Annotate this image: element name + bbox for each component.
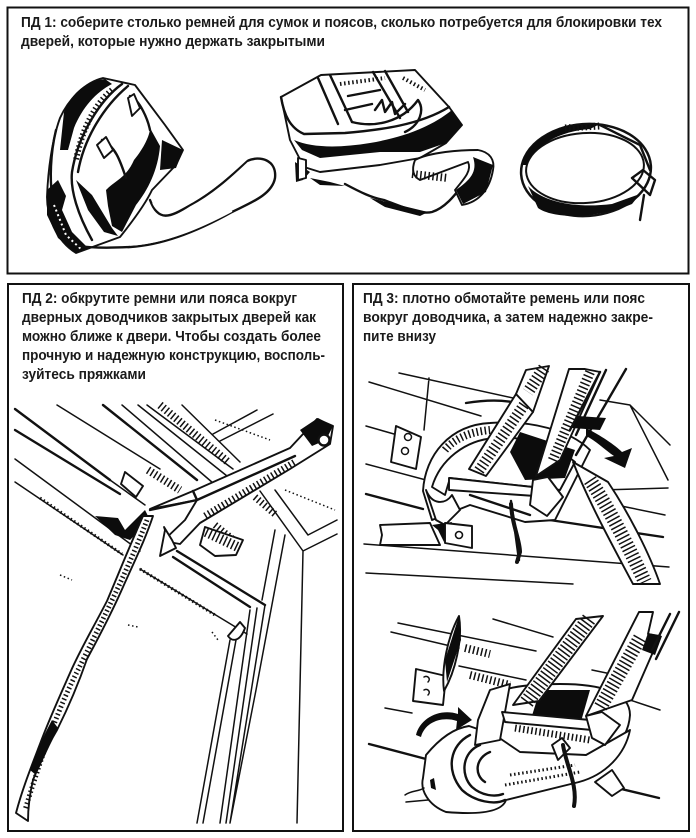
panel: step 2 — [8, 284, 343, 831]
heading: step 2 text — [22, 290, 325, 383]
illustration: belt wrapped around closer, top — [364, 366, 670, 584]
upper arm — [469, 394, 533, 476]
icon: shoulder bag — [281, 70, 493, 216]
front band — [422, 726, 630, 813]
illustration: door closer with strap — [15, 405, 337, 823]
heading: step 2 text: ПД 2: обкрутите ремни или пояса вокруг — [22, 290, 297, 307]
specks — [60, 420, 335, 640]
belt loop — [423, 422, 590, 522]
door closer arm — [95, 418, 333, 556]
heading: step 2 text: можно ближе к двери. Чтобы создать более — [22, 328, 321, 345]
clamp under band — [405, 788, 428, 802]
illustration: belt wrapped around closer, bottom — [369, 612, 679, 813]
strap — [16, 516, 153, 821]
heading: step 1 text — [21, 14, 663, 50]
heading: step 2 text: зуйтесь пряжками — [22, 366, 146, 383]
curved arrow — [586, 428, 632, 468]
door frame lines — [15, 405, 337, 823]
buckle bar — [502, 712, 592, 730]
icon: belt ring — [518, 120, 655, 220]
buckle — [449, 478, 535, 496]
heading: step 1 text: дверей, которые нужно держать закрытыми — [21, 33, 325, 50]
heading: step 2 text: дверных доводчиков закрытых дверей как — [22, 309, 316, 326]
icon: handbag with chain — [47, 78, 275, 253]
heading: step 3 text — [363, 290, 653, 345]
heading: step 3 text: вокруг доводчика, а затем надежно закре- — [363, 309, 653, 326]
heading: step 2 text: прочную и надежную конструкцию, восполь- — [22, 347, 325, 364]
left arm — [513, 616, 603, 705]
curved arrow — [416, 707, 472, 737]
heading: step 3 text: ПД 3: плотно обмотайте ремень или пояс — [363, 290, 645, 307]
heading: step 3 text: пите внизу — [363, 328, 437, 345]
lower strap — [573, 462, 660, 584]
ring — [486, 684, 630, 768]
right arm — [586, 612, 660, 716]
panel: step 1 — [8, 8, 688, 274]
middle arm — [536, 369, 600, 476]
wrap over — [475, 684, 510, 745]
panel: step 3 — [353, 284, 689, 831]
